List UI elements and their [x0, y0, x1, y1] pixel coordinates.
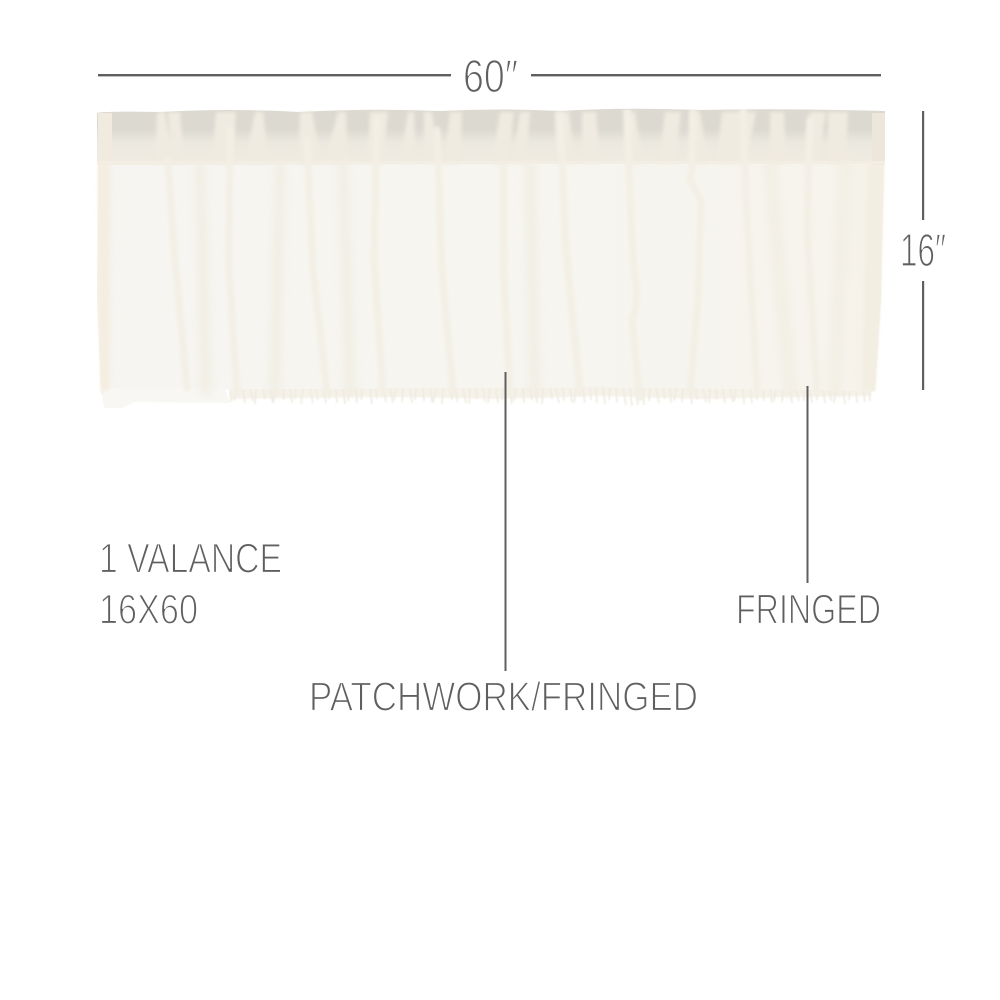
patchwork fringed strips: [168, 110, 845, 400]
product count and size: [99, 534, 282, 632]
callout: patchwork/fringed: PATCHWORK/FRINGED: [309, 674, 698, 720]
fringe along bottom edge: [230, 386, 872, 406]
product count and size: 16X60: [99, 586, 198, 632]
product count and size: 1 VALANCE: [99, 534, 282, 582]
fabric body: [97, 160, 884, 394]
header seam: [97, 161, 885, 164]
gathers in header: [156, 111, 848, 140]
callout: fringed: FRINGED: [736, 586, 881, 632]
curtain valance: [97, 109, 885, 408]
width dimension: 60 inches: 60″: [463, 50, 518, 102]
plain bottom hem at left: [101, 388, 230, 408]
left and right hems: [98, 113, 885, 392]
height dimension: 16 inches: 16″: [900, 224, 946, 276]
header band with rod pocket: [97, 109, 885, 165]
